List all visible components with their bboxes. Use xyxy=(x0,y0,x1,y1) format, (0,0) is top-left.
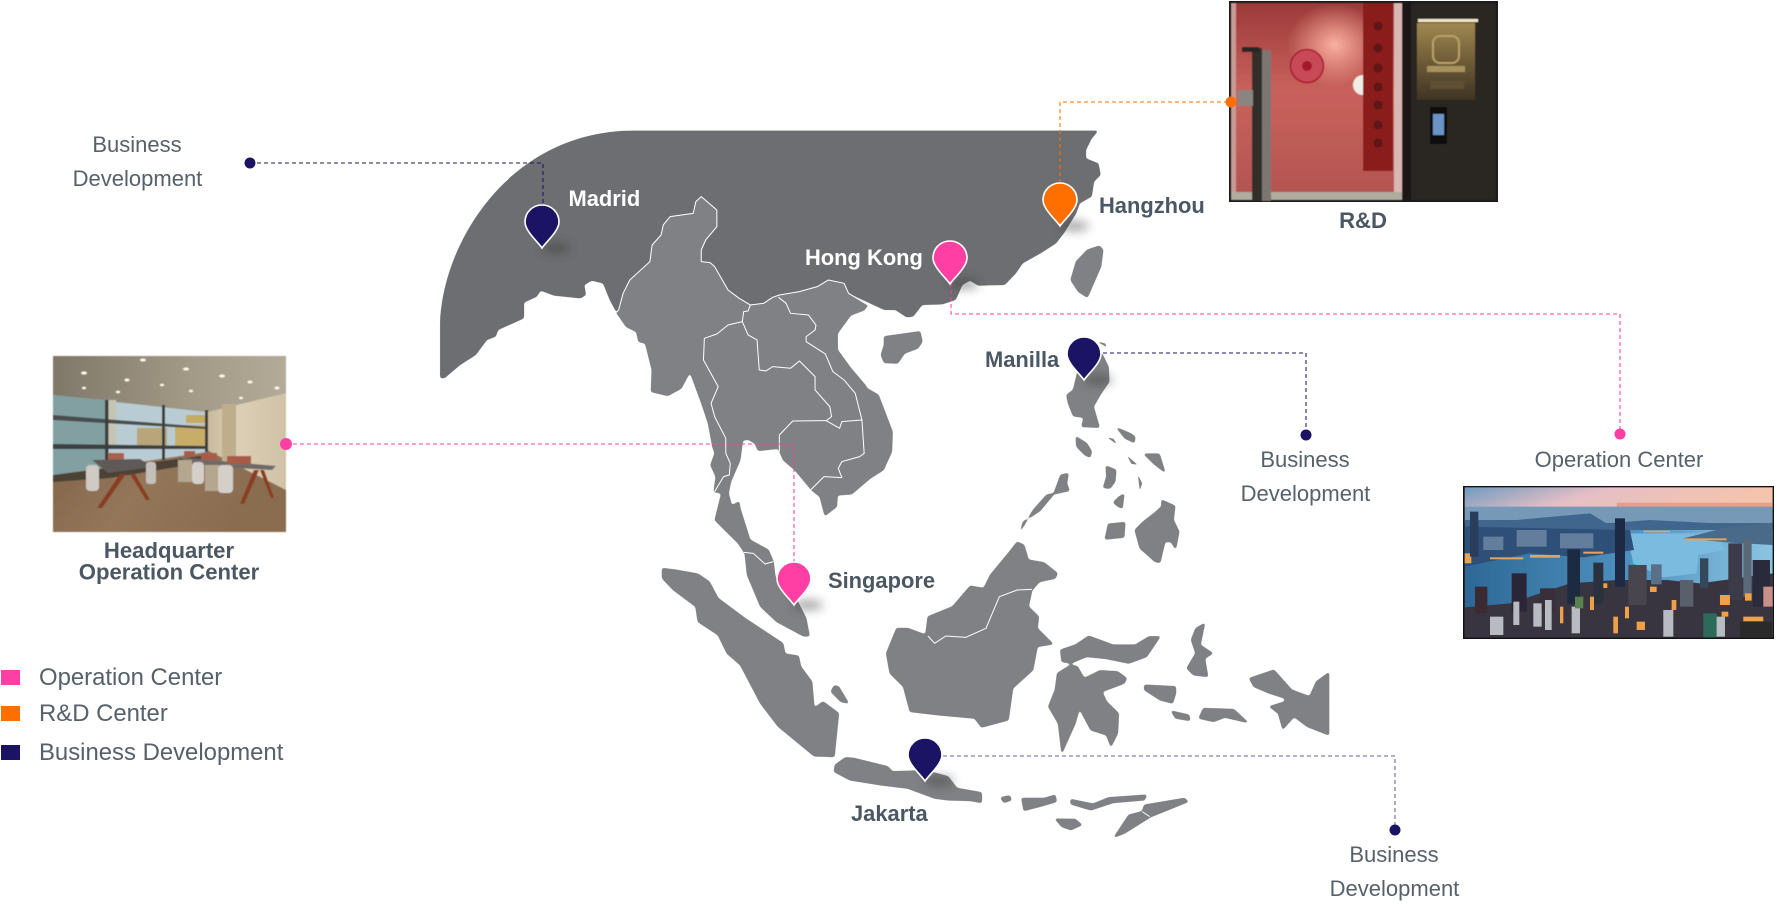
connector: Manilla to Business Development xyxy=(1103,353,1312,440)
connector: Jakarta to Business Development xyxy=(943,756,1400,836)
label: Madrid: Madrid xyxy=(568,186,640,211)
map: small Philippine islets xyxy=(1100,343,1142,488)
label: Jakarta: Jakarta xyxy=(851,801,929,826)
text: Business Development, Jakarta: Business xyxy=(1349,842,1439,867)
map: Southeast Asia mainland xyxy=(616,197,892,636)
text: Business Development, top left: Development xyxy=(73,166,202,191)
map: dark northern landmass xyxy=(440,131,1101,378)
connector: Singapore to Headquarter photo xyxy=(286,444,794,562)
text: Business Development, Manilla: Business xyxy=(1260,447,1350,472)
pin: Hong Kong xyxy=(933,241,979,289)
caption: Headquarter Operation Center: Operation Center xyxy=(79,560,260,585)
legend item: Business Development: Business Development xyxy=(39,739,284,766)
legend xyxy=(1,664,284,766)
map: Taiwan and Hainan xyxy=(881,246,1103,363)
caption: R&D: R&D xyxy=(1339,208,1387,233)
label: Singapore: Singapore xyxy=(828,568,935,593)
pin: Singapore xyxy=(777,562,823,610)
pin: Hangzhou xyxy=(1043,183,1089,231)
text: Business Development, Jakarta: Development xyxy=(1330,876,1459,901)
pin: Manilla xyxy=(1067,337,1113,385)
pin: Madrid xyxy=(525,205,571,253)
text: Operation Center: Operation Center xyxy=(1535,447,1703,472)
legend item: Operation Center: Operation Center xyxy=(39,664,222,691)
map: Southeast Asia country borders xyxy=(616,197,868,564)
text: Business Development, top left: Business xyxy=(92,132,182,157)
map: Borneo and Timor borders xyxy=(928,589,1150,817)
text: Business Development, Manilla: Development xyxy=(1241,481,1370,506)
caption: Headquarter Operation Center: Headquarter xyxy=(104,538,234,563)
label: Hangzhou: Hangzhou xyxy=(1099,193,1205,218)
map: Indonesia, Borneo and eastern islands xyxy=(662,542,1329,837)
pin: Jakarta xyxy=(908,738,954,786)
label: Hong Kong: Hong Kong xyxy=(805,245,923,270)
connector: Hong Kong to Operation Center xyxy=(951,283,1626,440)
photo: R&D office entrance xyxy=(1226,1,1498,202)
connector: Hangzhou to R&D photo xyxy=(1060,102,1231,183)
photo: Hong Kong skyline xyxy=(1463,486,1774,639)
legend item: R&D Center: R&D Center xyxy=(39,700,168,727)
photo: Headquarter office xyxy=(53,356,292,532)
connector: Madrid to Business Development xyxy=(244,158,543,205)
label: Manilla: Manilla xyxy=(985,347,1060,372)
map: Philippines xyxy=(1020,353,1179,563)
